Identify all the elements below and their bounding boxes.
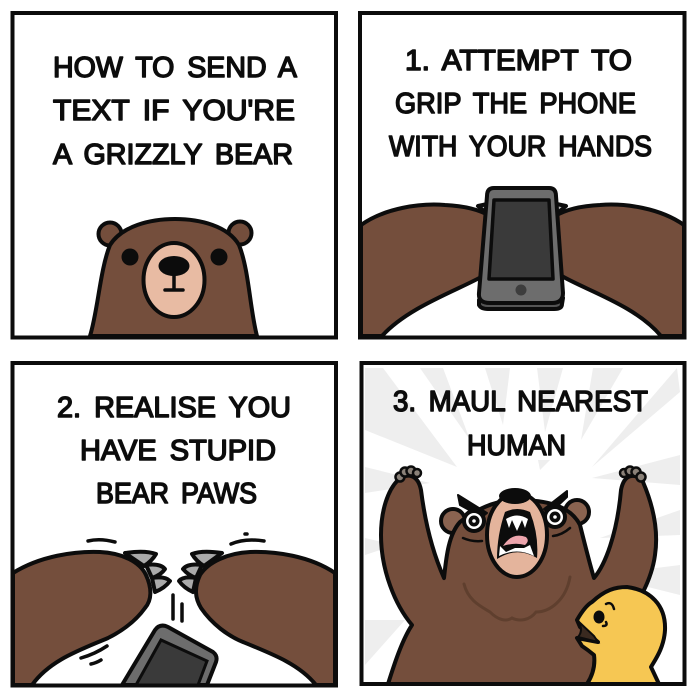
step 3 text: 3. MAUL NEAREST — [393, 386, 648, 418]
angry bear — [381, 466, 656, 684]
step 2 text: HAVE STUPID — [80, 435, 276, 467]
step 2 text: 2. REALISE YOU — [57, 392, 291, 424]
right claws — [179, 552, 222, 592]
step 1 text: GRIP THE PHONE — [395, 88, 636, 120]
title text: A GRIZZLY BEAR — [53, 139, 293, 171]
bear arms — [361, 203, 684, 336]
raised claws — [396, 466, 646, 482]
step 1 text: WITH YOUR HANDS — [389, 131, 652, 163]
bear muzzle and mouth — [487, 488, 547, 577]
panel 4: maul nearest human — [362, 363, 684, 684]
title text: HOW TO SEND A — [53, 52, 298, 84]
motion lines — [81, 534, 264, 664]
icon: falling phone — [122, 626, 217, 685]
right paw — [196, 552, 335, 685]
left paw — [13, 552, 150, 685]
step 2 text — [57, 392, 291, 510]
panel 2: gripping the phone — [360, 13, 684, 337]
icon: phone — [479, 188, 563, 309]
sunburst rays — [365, 368, 680, 665]
icon: bear face — [90, 219, 257, 336]
bear eyes and brows — [458, 491, 567, 531]
step 2 text: BEAR PAWS — [96, 478, 257, 510]
panel 1: title and bear face — [13, 13, 336, 337]
panel 3: stupid bear paws — [13, 363, 336, 685]
title text — [53, 52, 298, 171]
step 1 text: 1. ATTEMPT TO — [405, 45, 632, 77]
left claws — [125, 552, 170, 592]
step 1 text — [389, 45, 652, 163]
human: yellow duck — [577, 587, 665, 684]
step 3 text: HUMAN — [467, 430, 566, 462]
title text: TEXT IF YOU'RE — [53, 95, 295, 127]
step 3 text — [393, 386, 648, 462]
